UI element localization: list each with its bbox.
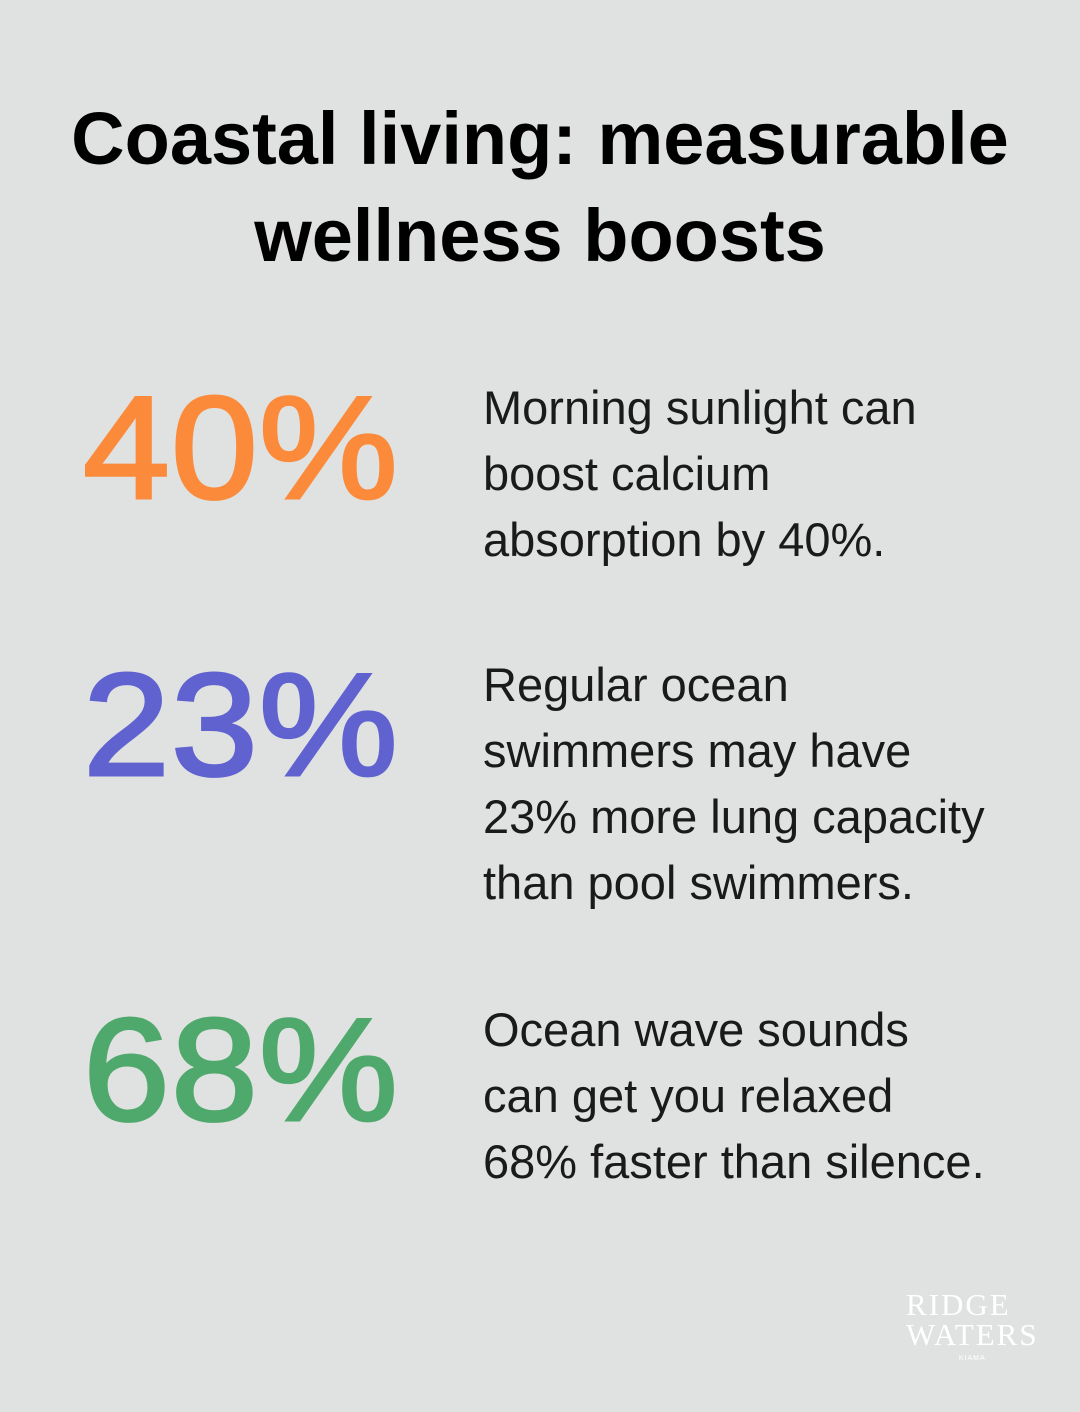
- logo: WATERS: [906, 1317, 1039, 1352]
- logo: [906, 1287, 1039, 1362]
- text: wave sounds: can get you relaxed: [483, 1069, 893, 1122]
- text: ocean swimmers: Regular ocean: [483, 658, 789, 711]
- title: wellness boosts: [254, 194, 826, 277]
- text: wave sounds: [483, 1003, 985, 1188]
- text: wave sounds: Ocean wave sounds: [483, 1003, 909, 1056]
- logo: RIDGE: [906, 1287, 1011, 1322]
- text: wave sounds: 68% faster than silence.: [483, 1135, 985, 1188]
- text: ocean swimmers: than pool swimmers.: [483, 856, 914, 909]
- text: ocean swimmers: swimmers may have: [483, 724, 911, 777]
- text: sunlight: Morning sunlight can: [483, 381, 917, 434]
- text: ocean swimmers: [483, 658, 985, 909]
- text: sunlight: [483, 381, 917, 566]
- text: sunlight: absorption by 40%.: [483, 513, 885, 566]
- text: sunlight: boost calcium: [483, 447, 770, 500]
- title: [71, 97, 1009, 277]
- text: ocean swimmers: 23% more lung capacity: [483, 790, 985, 843]
- logo: KIAMA: [959, 1355, 986, 1362]
- stat: 23%: 23%: [83, 643, 399, 806]
- stat: 40%: 40%: [83, 366, 399, 529]
- stat: 68%: 68%: [83, 988, 399, 1151]
- title: Coastal living: measurable: [71, 97, 1009, 180]
